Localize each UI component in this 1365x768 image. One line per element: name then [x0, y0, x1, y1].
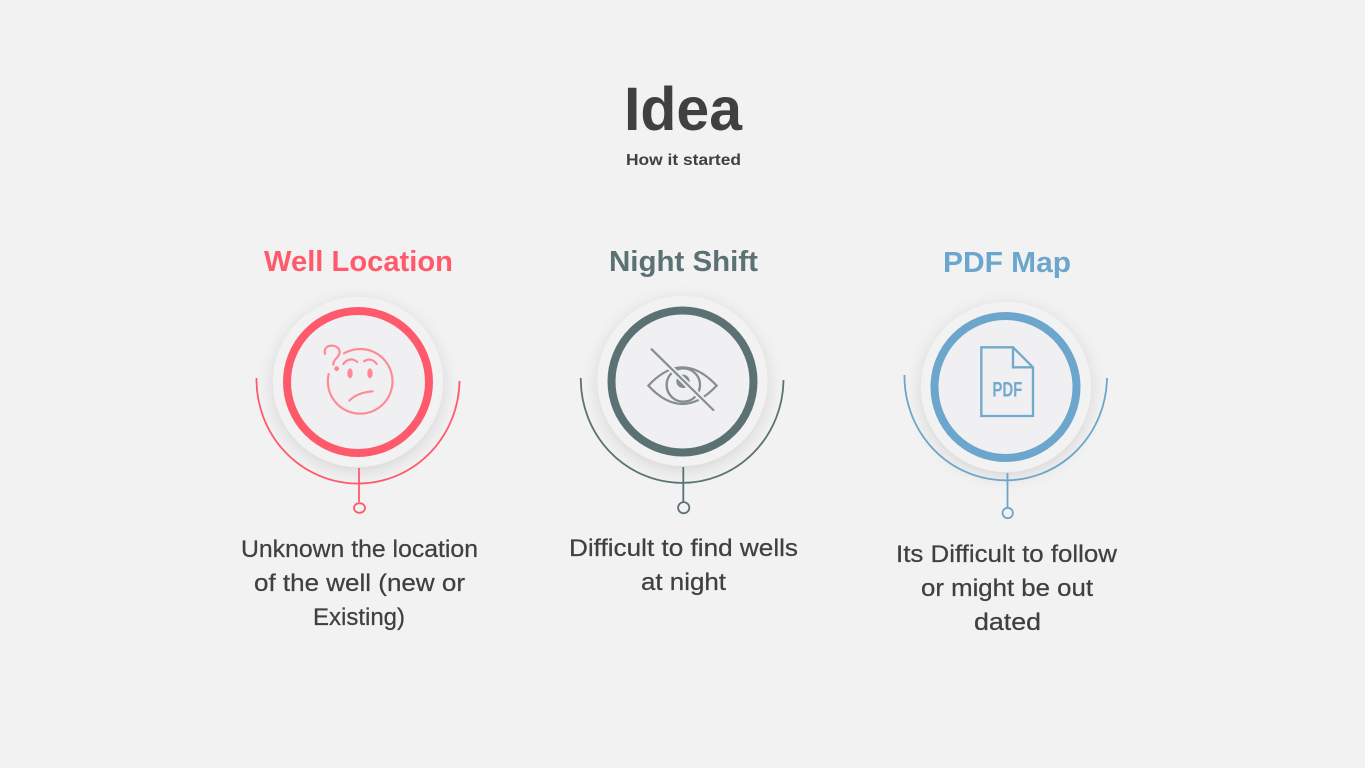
text: well location	[241, 536, 478, 631]
panel: night shift	[569, 246, 798, 596]
icon: pdf document	[981, 347, 1033, 416]
arc: well location	[256, 378, 460, 484]
heading: pdf map: PDF Map	[943, 247, 1071, 279]
arc: night shift	[581, 378, 784, 483]
icon: crossed-out eye	[648, 349, 717, 410]
text: well location: of the well (new or	[254, 570, 465, 597]
text: night shift: at night	[641, 569, 726, 596]
heading: well location: Well Location	[264, 246, 453, 278]
panel: pdf map	[896, 247, 1118, 636]
text: pdf map: dated	[974, 609, 1041, 636]
connector: well location	[358, 468, 360, 502]
text: night shift	[569, 535, 798, 596]
marker: night shift	[678, 502, 689, 513]
marker: pdf map	[1002, 508, 1013, 518]
arc: pdf map	[904, 375, 1107, 480]
connector: pdf map	[1006, 473, 1008, 508]
title: Idea	[624, 75, 743, 143]
icon: confused face	[325, 346, 392, 414]
icon: pdf document: PDF	[992, 378, 1022, 402]
panel: well location	[241, 246, 478, 631]
disc: well location	[273, 297, 443, 467]
heading: night shift: Night Shift	[609, 246, 758, 278]
text: pdf map: or might be out	[921, 575, 1093, 602]
connector: night shift	[682, 467, 684, 502]
marker: well location	[354, 503, 365, 513]
disc: night shift	[598, 296, 768, 466]
text: well location: Existing)	[313, 604, 405, 631]
ring: well location	[287, 311, 429, 453]
text: night shift: Difficult to find wells	[569, 535, 798, 562]
subtitle: How it started	[626, 152, 741, 169]
disc: pdf map	[921, 302, 1091, 472]
text: pdf map	[896, 541, 1118, 636]
ring: pdf map	[934, 316, 1076, 458]
text: pdf map: Its Difficult to follow	[896, 541, 1118, 568]
ring: night shift	[612, 310, 754, 452]
text: well location: Unknown the location	[241, 536, 478, 563]
